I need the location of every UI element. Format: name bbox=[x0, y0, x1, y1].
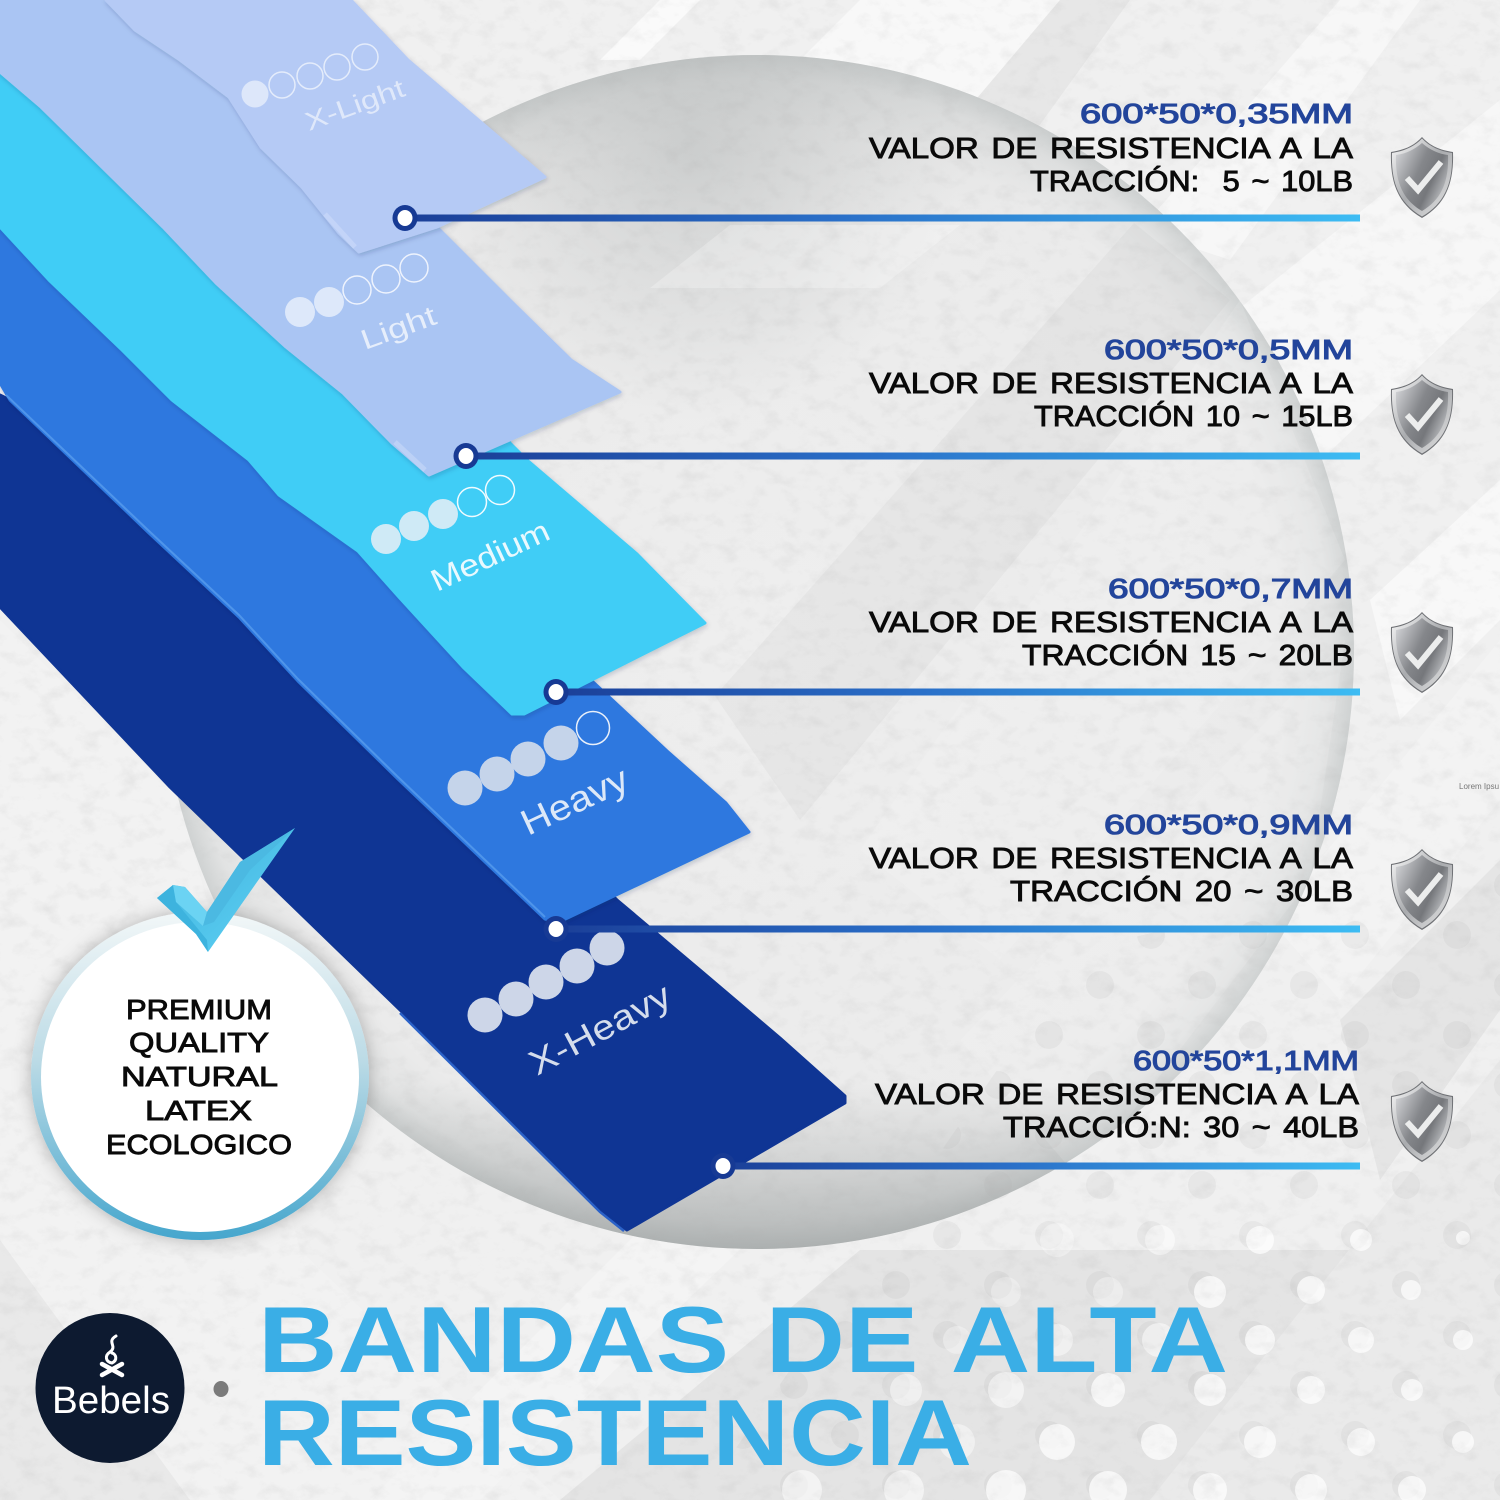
spec block: 0,35mm bbox=[869, 98, 1354, 198]
badge: premium quality bbox=[31, 912, 369, 1240]
icon: shield 2 bbox=[1391, 374, 1453, 455]
leader line 3 bbox=[544, 679, 1360, 705]
badge: premium quality: ECOLOGICO bbox=[106, 1129, 292, 1160]
leader line 2 bbox=[454, 443, 1360, 469]
spec block: 0,35mm: TRACCIÓN: 5 ~ 10LB bbox=[1030, 165, 1353, 198]
band: X-Light bbox=[106, 0, 545, 252]
spec block: 0,9mm: 600*50*0,9MM bbox=[1104, 809, 1353, 840]
spec block: 1,1mm: TRACCIÓ:N: 30 ~ 40LB bbox=[1003, 1111, 1359, 1144]
badge: premium quality: QUALITY bbox=[129, 1027, 269, 1058]
band: Light: Light bbox=[356, 300, 441, 356]
leader line 5 bbox=[710, 1153, 1360, 1179]
band: X-Light: X-Light bbox=[301, 73, 410, 137]
spec block: 1,1mm: 600*50*1,1MM bbox=[1133, 1045, 1359, 1076]
icon: shield 5 bbox=[1391, 1081, 1453, 1162]
icon: shield 1 bbox=[1391, 137, 1453, 218]
band: Heavy bbox=[0, 230, 749, 923]
title bbox=[258, 1287, 1228, 1485]
spec block: 0,7mm: 600*50*0,7MM bbox=[1108, 573, 1353, 604]
spec block: 0,5mm: TRACCIÓN 10 ~ 15LB bbox=[1034, 400, 1353, 433]
icon: shield 3 bbox=[1391, 612, 1453, 693]
badge: premium quality: NATURAL bbox=[121, 1061, 278, 1092]
spec block: 1,1mm: VALOR DE RESISTENCIA A LA bbox=[875, 1079, 1360, 1111]
badge: premium quality: LATEX bbox=[145, 1095, 252, 1126]
leader line 1 bbox=[392, 205, 1360, 231]
title: BANDAS DE ALTA bbox=[258, 1287, 1228, 1392]
spec block: 0,9mm bbox=[869, 809, 1354, 908]
spec block: 0,5mm: VALOR DE RESISTENCIA A LA bbox=[869, 368, 1354, 400]
spec block: 0,9mm: VALOR DE RESISTENCIA A LA bbox=[869, 843, 1354, 875]
logo: Bebels: Bebels bbox=[52, 1380, 170, 1422]
title: RESISTENCIA bbox=[258, 1380, 972, 1485]
spec block: 0,7mm bbox=[869, 573, 1354, 672]
band: X-Heavy: X-Heavy bbox=[522, 976, 678, 1083]
icon: shield 4 bbox=[1391, 849, 1453, 930]
bottom-right dot pattern bbox=[700, 850, 1500, 1500]
icon: flame and crossed logs bbox=[102, 1336, 122, 1375]
band: X-Heavy bbox=[0, 395, 845, 1231]
small placeholder text: Lorem Ipsu bbox=[1459, 782, 1499, 791]
spec block: 0,9mm: TRACCIÓN 20 ~ 30LB bbox=[1010, 875, 1353, 908]
band: Medium: Medium bbox=[425, 513, 555, 598]
bullet dot bbox=[214, 1381, 228, 1397]
logo: Bebels bbox=[36, 1313, 184, 1463]
spec block: 0,5mm bbox=[869, 334, 1354, 433]
spec block: 1,1mm bbox=[875, 1045, 1360, 1144]
icon: check mark bbox=[157, 828, 295, 952]
large background circle bbox=[160, 55, 1354, 1249]
band: Heavy: Heavy bbox=[514, 758, 635, 843]
spec block: 0,7mm: TRACCIÓN 15 ~ 20LB bbox=[1022, 639, 1353, 672]
spec block: 0,5mm: 600*50*0,5MM bbox=[1104, 334, 1353, 365]
band: Light bbox=[0, 0, 620, 475]
spec block: 0,35mm: 600*50*0,35MM bbox=[1080, 98, 1353, 129]
spec block: 0,7mm: VALOR DE RESISTENCIA A LA bbox=[869, 607, 1354, 639]
band: Medium bbox=[0, 70, 705, 714]
leader line 4 bbox=[544, 916, 1360, 942]
spec block: 0,35mm: VALOR DE RESISTENCIA A LA bbox=[869, 133, 1354, 165]
badge: premium quality: PREMIUM bbox=[126, 994, 272, 1025]
